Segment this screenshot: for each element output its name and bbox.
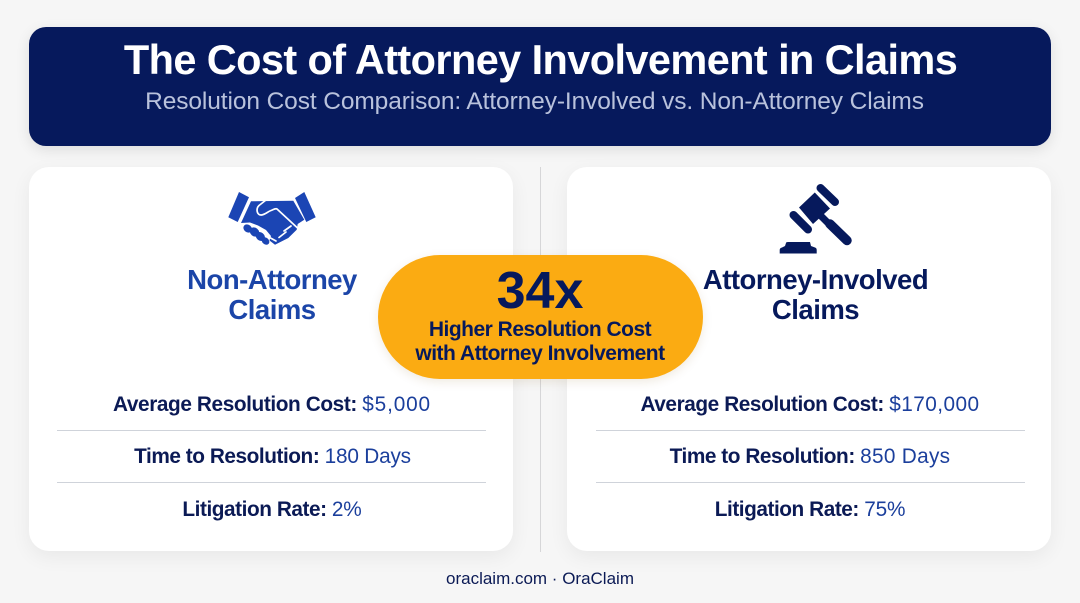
heading: attorney-involved claims: Claims <box>772 294 859 325</box>
heading: non-attorney claims: Non-Attorney <box>187 264 357 295</box>
heading: attorney-involved claims <box>703 264 928 325</box>
heading: attorney-involved claims: Attorney-Involved <box>703 264 928 295</box>
heading: non-attorney claims <box>187 264 358 325</box>
subtitle: Resolution Cost Comparison: Attorney-Involved vs. Non-Attorney Claims <box>145 88 924 115</box>
centre divider <box>540 167 541 552</box>
header banner <box>29 27 1051 146</box>
footer source: oraclaim.com · OraClaim <box>446 569 634 588</box>
callout text: Higher Resolution Cost <box>429 318 651 341</box>
callout number: 34x <box>497 262 583 320</box>
title: The Cost of Attorney Involvement in Claims <box>124 36 957 83</box>
panel: attorney-involved claims <box>567 167 1051 551</box>
icon: handshake <box>228 192 316 245</box>
stat: litigation rate: Litigation Rate: 2% <box>182 498 362 521</box>
callout text: with Attorney Involvement <box>415 342 665 365</box>
stat: time to resolution: Time to Resolution: 180 Days <box>134 445 411 468</box>
stat: time to resolution: Time to Resolution: 850 Days <box>670 445 950 468</box>
callout text <box>415 318 665 365</box>
callout: 34x multiplier <box>378 255 703 379</box>
icon: gavel <box>780 184 852 254</box>
stat: average resolution cost: Average Resolution Cost: $170,000 <box>640 393 980 416</box>
stat: average resolution cost: Average Resolution Cost: $5,000 <box>113 393 431 416</box>
panel: non-attorney claims <box>29 167 513 551</box>
stat: litigation rate: Litigation Rate: 75% <box>715 498 905 521</box>
heading: non-attorney claims: Claims <box>228 294 316 325</box>
